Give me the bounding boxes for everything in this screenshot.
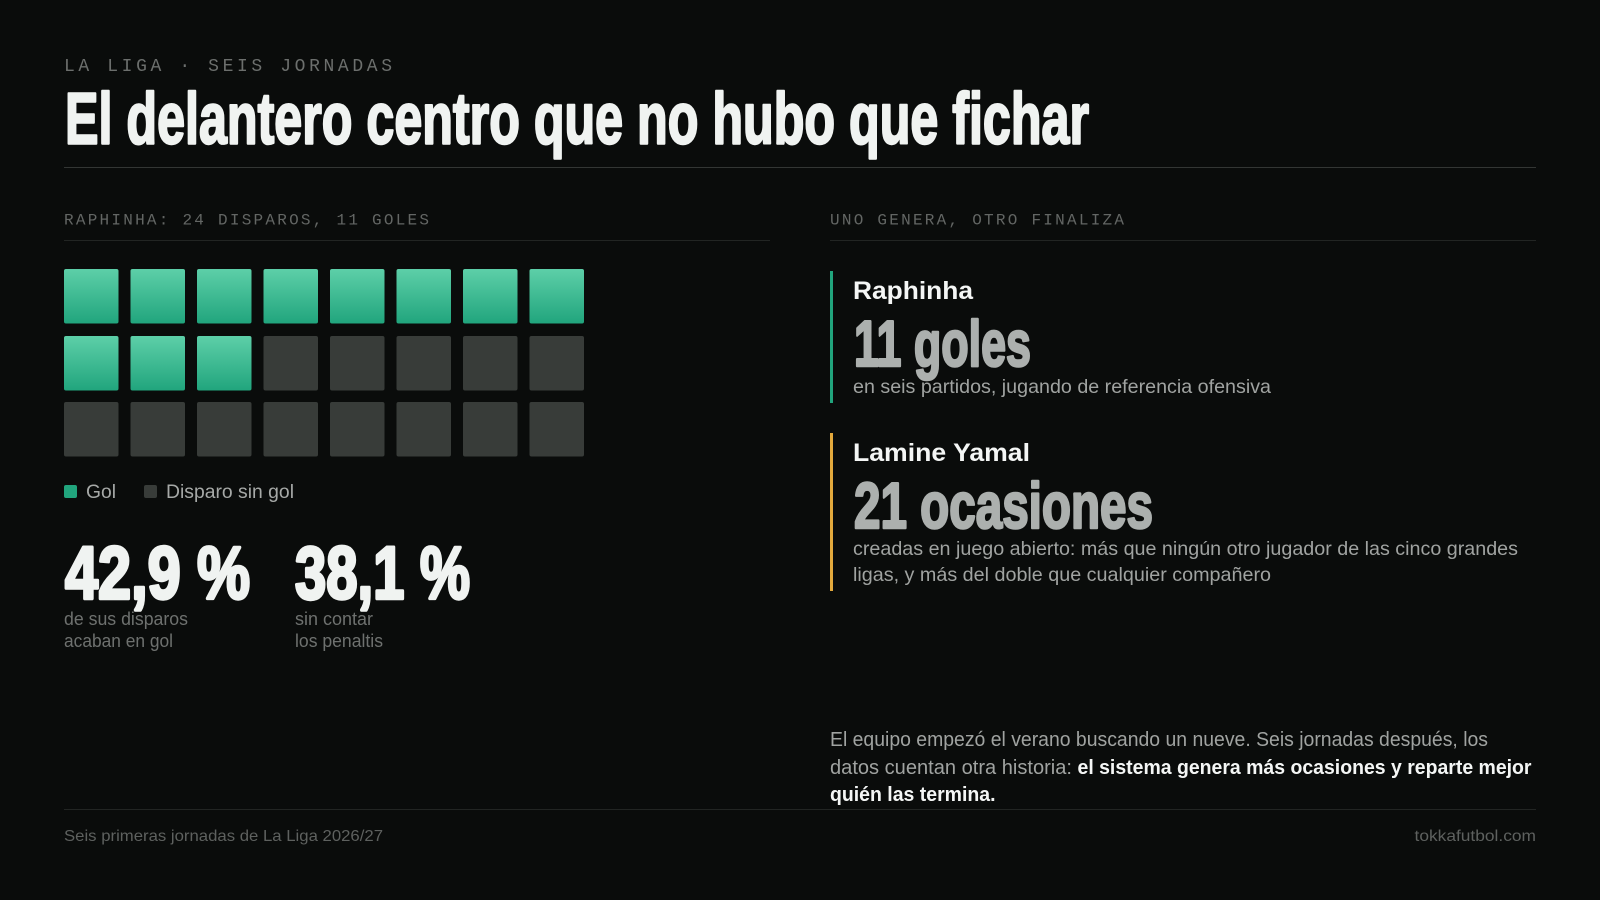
panel: shots: [64, 212, 770, 651]
eyebrow: LA LIGA · SEIS JORNADAS: [64, 57, 392, 77]
stat: 38,1 %: los penaltis: [295, 631, 383, 651]
legend: Gol: [86, 482, 116, 503]
title: El delantero centro que no hubo que fichar: [65, 80, 1089, 160]
footer source: Seis primeras jornadas de La Liga 2026/27: [64, 828, 383, 845]
conclusion text: el sistema genera más ocasiones y reparte mejor: [1078, 757, 1532, 779]
conclusion text: [830, 729, 1532, 806]
card: Raphinha: 11 goles: [854, 307, 1031, 380]
conclusion text: quién las termina.: [830, 784, 996, 806]
card: Lamine Yamal: ligas, y más del doble que cualquier compañero: [853, 564, 1271, 586]
conclusion text: El equipo empezó el verano buscando un nueve. Seis jornadas después, los: [830, 729, 1488, 751]
card: Lamine Yamal: Lamine Yamal: [853, 439, 1030, 467]
stat: 38,1 %: [295, 532, 470, 651]
conclusion text: datos cuentan otra historia:: [830, 757, 1072, 779]
waffle chart: 24 shots, 11 goals: [64, 269, 584, 456]
stat: 42,9 %: [64, 532, 250, 651]
footer site: tokkafutbol.com: [1414, 828, 1536, 845]
legend: Disparo sin gol: [166, 482, 294, 503]
card: Lamine Yamal: creadas en juego abierto: más que ningún otro jugador de las cinco grandes: [853, 538, 1518, 560]
stat: 38,1 %: 38,1 %: [295, 532, 470, 614]
stat: 42,9 %: 42,9 %: [65, 532, 250, 614]
stat: 42,9 %: de sus disparos: [64, 609, 188, 629]
panel: players: [830, 212, 1536, 806]
card: Raphinha: en seis partidos, jugando de referencia ofensiva: [853, 376, 1271, 398]
section heading: shots: RAPHINHA: 24 DISPAROS, 11 GOLES: [64, 212, 429, 230]
card: Lamine Yamal: [830, 433, 1518, 591]
stat: 42,9 %: acaban en gol: [64, 631, 173, 651]
legend: [64, 482, 294, 503]
card: Raphinha: [830, 271, 1271, 403]
stat: 38,1 %: sin contar: [295, 609, 373, 629]
card: Raphinha: Raphinha: [853, 277, 974, 305]
section heading: players: UNO GENERA, OTRO FINALIZA: [830, 212, 1124, 230]
card: Lamine Yamal: 21 ocasiones: [854, 469, 1153, 542]
